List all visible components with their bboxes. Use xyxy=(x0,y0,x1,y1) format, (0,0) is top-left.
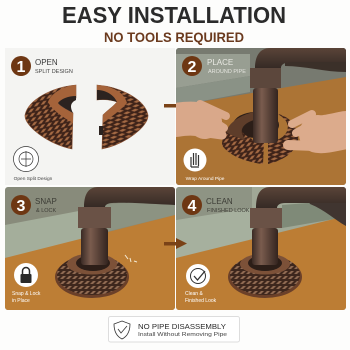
subtitle: NO TOOLS REQUIRED xyxy=(104,29,244,45)
flange halves xyxy=(222,111,298,164)
pipe xyxy=(250,187,346,265)
right hand xyxy=(288,114,346,146)
arrow 3 to 4 xyxy=(164,238,187,249)
step 1 heading: OPEN xyxy=(35,58,58,67)
callout: no pipe disassembly xyxy=(108,316,240,342)
flange xyxy=(55,254,129,298)
step 2 badge xyxy=(182,56,202,76)
arrow 1 to 2 xyxy=(164,100,186,112)
icon: open split design xyxy=(14,146,38,172)
icon: check xyxy=(186,264,210,288)
caption: snap and lock: Snap & Lock xyxy=(12,291,41,297)
panel: step 3 snap xyxy=(5,187,175,310)
callout subtext: Install Without Removing Pipe xyxy=(138,332,227,338)
step 4 subheading: FINISHED LOOK xyxy=(207,208,250,214)
step 1 subheading: SPLIT DESIGN xyxy=(35,69,73,75)
caption: wrap around pipe: Wrap Around Pipe xyxy=(186,176,225,182)
caption: open split design: Open Split Design xyxy=(14,176,53,182)
step 3 subheading: & LOCK xyxy=(36,208,57,214)
step 1 badge xyxy=(11,56,31,76)
panel: step 4 clean xyxy=(176,187,346,310)
step 2 badge: 2 xyxy=(188,59,197,76)
callout heading: NO PIPE DISASSEMBLY xyxy=(138,324,226,331)
left hand xyxy=(176,104,226,135)
panel: step 1 open xyxy=(5,48,175,185)
arrow tip xyxy=(176,238,187,249)
panel: step 2 place xyxy=(176,48,346,185)
step 3 badge xyxy=(11,195,31,215)
step 3 heading: SNAP xyxy=(35,197,57,206)
step 4 badge: 4 xyxy=(188,198,197,215)
icon: lock xyxy=(14,263,38,287)
caption line 2: in Place xyxy=(12,298,30,304)
title: EASY INSTALLATION xyxy=(62,2,286,28)
flange xyxy=(228,254,302,298)
pipe xyxy=(250,48,346,143)
icon: hand xyxy=(184,148,206,172)
icon: shield xyxy=(114,321,130,339)
step 2 heading: PLACE xyxy=(207,58,233,67)
pipe xyxy=(78,187,175,265)
step 2 subheading: AROUND PIPE xyxy=(208,69,246,75)
step 4 badge xyxy=(182,195,202,215)
step 4 heading: CLEAN xyxy=(206,197,233,206)
step 1 badge: 1 xyxy=(17,59,26,76)
caption line 2: Finished Look xyxy=(185,298,217,304)
flange left half xyxy=(25,85,76,149)
snap marks xyxy=(125,255,137,262)
flange right half xyxy=(97,85,148,149)
step 3 badge: 3 xyxy=(17,198,26,215)
caption: clean and finished: Clean & xyxy=(185,291,203,297)
